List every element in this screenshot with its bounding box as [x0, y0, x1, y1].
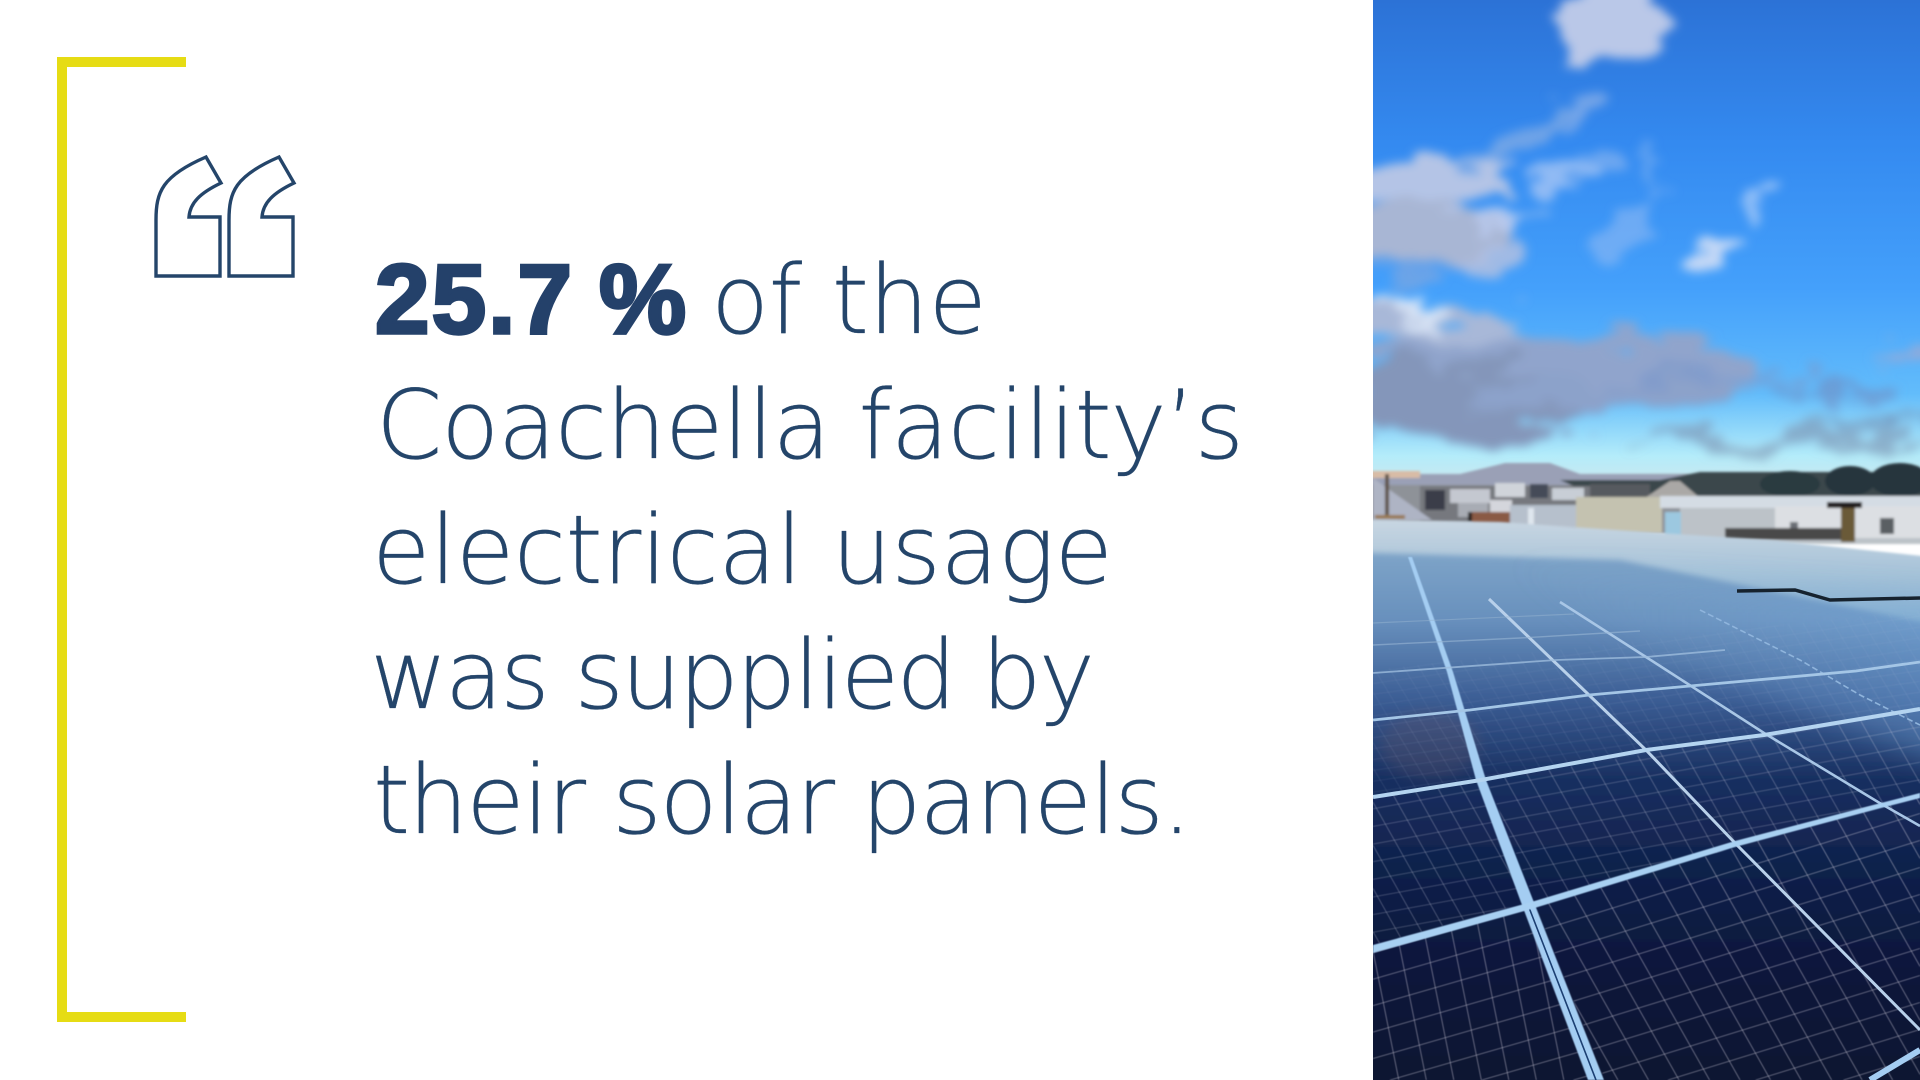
- long rail: third: [1560, 602, 1920, 826]
- roof surface: [1340, 519, 1920, 630]
- line 3: electrical usage: [372, 496, 1113, 606]
- line 2: Coachella facility’s: [376, 371, 1244, 481]
- icon: quotation mark outline: [156, 157, 294, 276]
- cross rail F: [1373, 614, 1574, 623]
- line 5: their solar panels.: [373, 746, 1192, 856]
- cross rail B: [1373, 709, 1920, 797]
- line 4: was supplied by: [370, 621, 1095, 731]
- horizon and buildings: [1360, 463, 1920, 544]
- panel rails: [1373, 557, 1920, 1080]
- corner rail bottom right: [1870, 1050, 1920, 1080]
- solar array base: [1340, 552, 1920, 1080]
- line 1: of the: [711, 246, 987, 356]
- long rail: fourth: [1700, 610, 1920, 725]
- cross rail A: [1373, 793, 1920, 953]
- sky reflection on upper right panels: [1694, 604, 1920, 768]
- long rail: second: [1489, 599, 1920, 1030]
- highlighted figure: %: [599, 244, 686, 354]
- cross rail E: [1373, 631, 1640, 645]
- highlighted figure: [375, 244, 686, 354]
- highlighted figure: 25.7: [375, 244, 572, 354]
- panel cell grids: [1373, 660, 1920, 1080]
- sky: [1373, 0, 1920, 480]
- cross rail D: [1373, 650, 1725, 673]
- brown reflection on left panel: [1380, 711, 1480, 779]
- photo: solar panels on rooftop under blue sky: [1330, 0, 1920, 1080]
- roof edge slot: [1737, 590, 1920, 600]
- quote text: [370, 244, 1244, 856]
- long rail: main: [1408, 557, 1604, 1080]
- cross rail C: [1373, 662, 1920, 720]
- yellow bracket: [57, 57, 186, 1022]
- clouds: [1330, 0, 1920, 447]
